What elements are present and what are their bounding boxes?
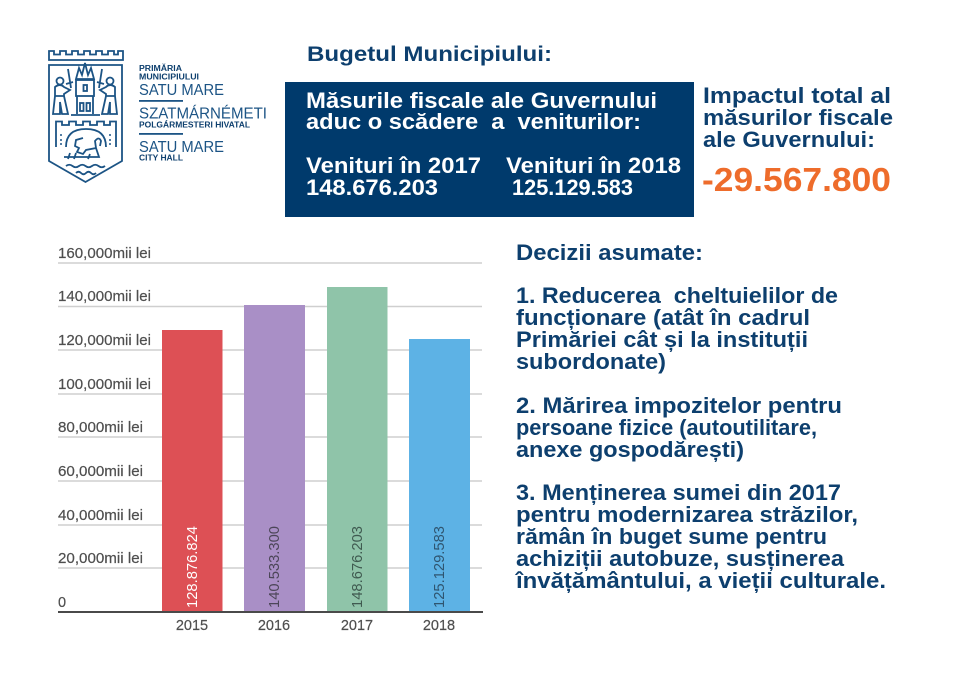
- decision 2: 2. Mărirea impozitelor pentru: [516, 393, 842, 418]
- panel heading: aduc o scădere a veniturilor:: [306, 109, 641, 134]
- icon: coat of arms: [49, 51, 123, 182]
- logo text: CITY HALL: [139, 154, 183, 162]
- lion: [64, 138, 101, 159]
- y axis labels: 20,000mii lei: [58, 551, 143, 567]
- bar 2018: [409, 339, 470, 612]
- bar chart: budget 2015-2018: [58, 246, 483, 634]
- logo: Satu Mare city hall: [49, 51, 267, 182]
- total impact label: măsurilor fiscale: [703, 105, 893, 130]
- left knight: [66, 69, 73, 88]
- decision 1: funcționare (atât în cadrul: [516, 305, 810, 330]
- decision 2: persoane fizice (autoutilitare,: [516, 415, 817, 440]
- bar 2017: 148.676.203: [349, 526, 366, 608]
- x axis labels: 2018: [423, 618, 455, 634]
- panel: government fiscal measures: [285, 82, 694, 217]
- total impact label: ale Guvernului:: [703, 127, 875, 152]
- y axis labels: 0: [58, 595, 66, 611]
- decision 3: învățământului, a vieții culturale.: [515, 568, 886, 593]
- panel heading: Măsurile fiscale ale Guvernului: [306, 88, 657, 113]
- wall: [56, 122, 116, 147]
- x axis labels: 2017: [341, 618, 373, 634]
- logo text: PRIMĂRIA: [139, 64, 182, 73]
- bar 2018: 125.129.583: [431, 526, 448, 608]
- bar 2016: 140.533.300: [266, 526, 283, 608]
- y axis labels: 60,000mii lei: [58, 464, 143, 480]
- x axis labels: [176, 618, 455, 634]
- decision 1: Primăriei cât și la instituții: [516, 327, 808, 352]
- logo text: SATU MARE: [139, 139, 224, 156]
- y axis labels: 40,000mii lei: [58, 508, 143, 524]
- logo text: [139, 64, 267, 162]
- y axis labels: 100,000mii lei: [58, 377, 151, 393]
- y axis labels: 120,000mii lei: [58, 333, 151, 349]
- revenue 2017: Venituri în 2017: [306, 153, 481, 178]
- logo text: MUNICIPIULUI: [139, 72, 199, 82]
- total impact value: -29.567.800: [702, 161, 891, 198]
- revenue 2018: Venituri în 2018: [506, 153, 681, 178]
- y axis labels: 160,000mii lei: [58, 246, 151, 262]
- right knight: [97, 69, 104, 88]
- x axis labels: 2015: [176, 618, 208, 634]
- y axis labels: 80,000mii lei: [58, 420, 143, 436]
- decision 3: 3. Menținerea sumei din 2017: [516, 480, 841, 505]
- decision 3: rămân în buget sume pentru: [516, 524, 827, 549]
- logo text: SATU MARE: [139, 82, 224, 99]
- y axis labels: 140,000mii lei: [58, 289, 151, 305]
- decision 1: 1. Reducerea cheltuielilor de: [516, 283, 838, 308]
- castle: [76, 63, 94, 79]
- decision 3: pentru modernizarea străzilor,: [516, 502, 858, 527]
- revenue 2018: 125.129.583: [512, 175, 633, 200]
- decision 2: anexe gospodărești): [516, 437, 744, 462]
- logo text: POLGÁRMESTERI HIVATAL: [139, 120, 250, 130]
- heading: budget: Bugetul Municipiului:: [307, 42, 552, 66]
- bar 2016: [244, 305, 305, 612]
- bar 2017: [327, 287, 388, 612]
- decision 1: subordonate): [516, 349, 666, 374]
- logo text: SZATMÁRNÉMETI: [139, 106, 267, 122]
- revenue 2017: 148.676.203: [306, 175, 438, 200]
- bar 2015: [162, 330, 222, 612]
- decision 3: achiziții autobuze, susținerea: [516, 546, 845, 571]
- y axis labels: [58, 246, 151, 611]
- heading: decisions: Decizii asumate:: [516, 240, 703, 265]
- waves: [66, 165, 105, 167]
- x axis labels: 2016: [258, 618, 290, 634]
- bar 2015: 128.876.824: [184, 526, 201, 608]
- total impact label: Impactul total al: [703, 83, 891, 108]
